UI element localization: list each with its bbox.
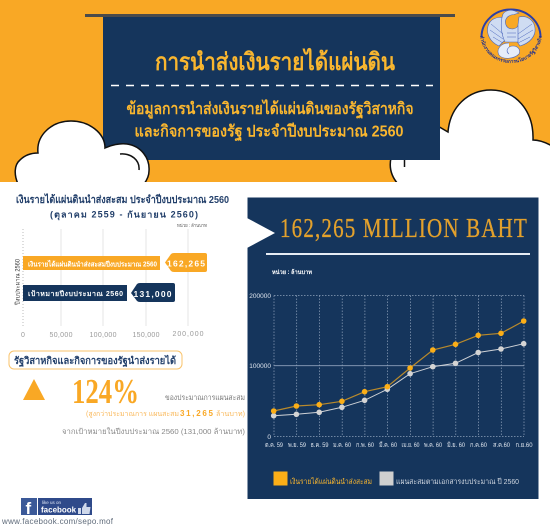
logo bird: [487, 10, 535, 58]
month labels: พ.ค. 60: [424, 442, 442, 449]
series: plan: [271, 341, 526, 419]
chart grid: [274, 296, 524, 436]
logo ring: [482, 9, 540, 37]
logo: [480, 8, 542, 64]
right cloud: [390, 90, 550, 184]
orange header background: [0, 0, 550, 182]
x axis labels: 200,000: [172, 331, 204, 338]
month labels: ธ.ค. 59: [310, 442, 329, 449]
y axis labels: [249, 293, 271, 441]
x axis labels: 50,000: [50, 332, 73, 339]
section heading box: [9, 351, 182, 369]
bar: target: [23, 283, 175, 302]
line chart: [249, 293, 533, 449]
left chart heading: เงินรายได้แผ่นดินนำส่งสะสม ประจำปีงบประมาณ 2560: [16, 193, 229, 206]
bar: accumulated revenue: 162,265: [167, 258, 205, 268]
performance notes: จากเป้าหมายในปีงบประมาณ 2560 (131,000 ล้านบาท): [62, 427, 246, 436]
month labels: ม.ค. 60: [333, 442, 351, 449]
month labels: เม.ย. 60: [402, 442, 420, 449]
left cloud: [15, 121, 149, 184]
month labels: [265, 441, 533, 449]
right chart panel: [247, 198, 538, 499]
month labels: มี.ค. 60: [379, 441, 397, 449]
month labels: ก.ค.60: [470, 442, 487, 449]
title banner: [85, 14, 455, 160]
x axis labels: 0: [21, 332, 25, 339]
124 percent: 124%: [72, 372, 139, 411]
performance notes: (สูงกว่าประมาณการ แผนสะสม: [86, 411, 179, 418]
subtitle: [126, 99, 414, 142]
bar: accumulated revenue: [23, 253, 207, 272]
main title: การนำส่งเงินรายได้แผ่นดิน: [155, 47, 396, 76]
grid: [61, 229, 188, 326]
dashed divider: [111, 84, 433, 86]
icon: up triangle: [23, 379, 45, 400]
legend: แผนสะสมตามเอกสารงบประมาณ ปี 2560: [396, 477, 519, 486]
subtitle: ข้อมูลการนำส่งเงินรายได้แผ่นดินของรัฐวิสาหกิจ: [126, 99, 414, 120]
facebook badge: f: [26, 499, 32, 518]
legend: [274, 472, 519, 486]
notch: [247, 218, 275, 248]
bar: accumulated revenue: เงินรายได้แผ่นดินนำส่งสะสมปีงบประมาณ 2560: [28, 260, 157, 268]
section heading box: รัฐวิสาหกิจและกิจการของรัฐนำส่งรายได้: [14, 354, 176, 367]
month labels: ก.ย.60: [516, 442, 533, 449]
month labels: พ.ย. 59: [288, 442, 306, 449]
banner rod: [85, 14, 455, 17]
month labels: ก.พ. 60: [356, 442, 374, 449]
month labels: ส.ค.60: [493, 442, 510, 449]
y axis labels: 100000: [249, 363, 271, 370]
left chart heading: (ตุลาคม 2559 - กันยายน 2560): [50, 210, 198, 220]
legend: เงินรายได้แผ่นดินนำส่งสะสม: [290, 477, 372, 486]
white page area below header: [0, 182, 550, 197]
x axis labels: [21, 331, 204, 339]
left chart heading: [16, 193, 229, 220]
x axis labels: 100,000: [90, 332, 117, 339]
series: revenue: [271, 318, 526, 414]
unit label: หน่วย : ล้านบาท: [272, 268, 312, 276]
headline underline: [266, 253, 530, 255]
y axis labels: 0: [267, 434, 271, 441]
month labels: ต.ค. 59: [265, 442, 283, 449]
performance notes: 31,265: [180, 409, 214, 418]
axis title: ปีงบประมาณ 2560: [14, 258, 22, 306]
performance notes: [62, 393, 246, 436]
x axis labels: 150,000: [132, 332, 160, 339]
performance notes: ล้านบาท): [216, 410, 245, 418]
facebook badge: facebook: [41, 506, 77, 514]
month labels: มิ.ย. 60: [447, 441, 465, 449]
facebook badge: like us on: [42, 500, 62, 505]
logo: สำนักงานคณะกรรมการนโยบายรัฐวิสาหกิจ: [480, 36, 542, 64]
subtitle: และกิจการของรัฐ ประจำปีงบประมาณ 2560: [134, 122, 404, 142]
banner panel: [103, 17, 440, 160]
bar chart: [14, 223, 207, 339]
performance notes: ของประมาณการแผนสะสม: [165, 393, 245, 402]
bar: target: 131,000: [134, 289, 172, 299]
facebook url: www.facebook.com/sepo.mof: [1, 517, 114, 526]
logo lettering: [480, 33, 542, 63]
unit label: หน่วย : ล้านบาท: [177, 223, 207, 228]
bar: target: เป้าหมายปีงบประมาณ 2560: [28, 289, 123, 298]
y axis labels: 200000: [249, 293, 271, 300]
facebook badge: [21, 498, 92, 518]
